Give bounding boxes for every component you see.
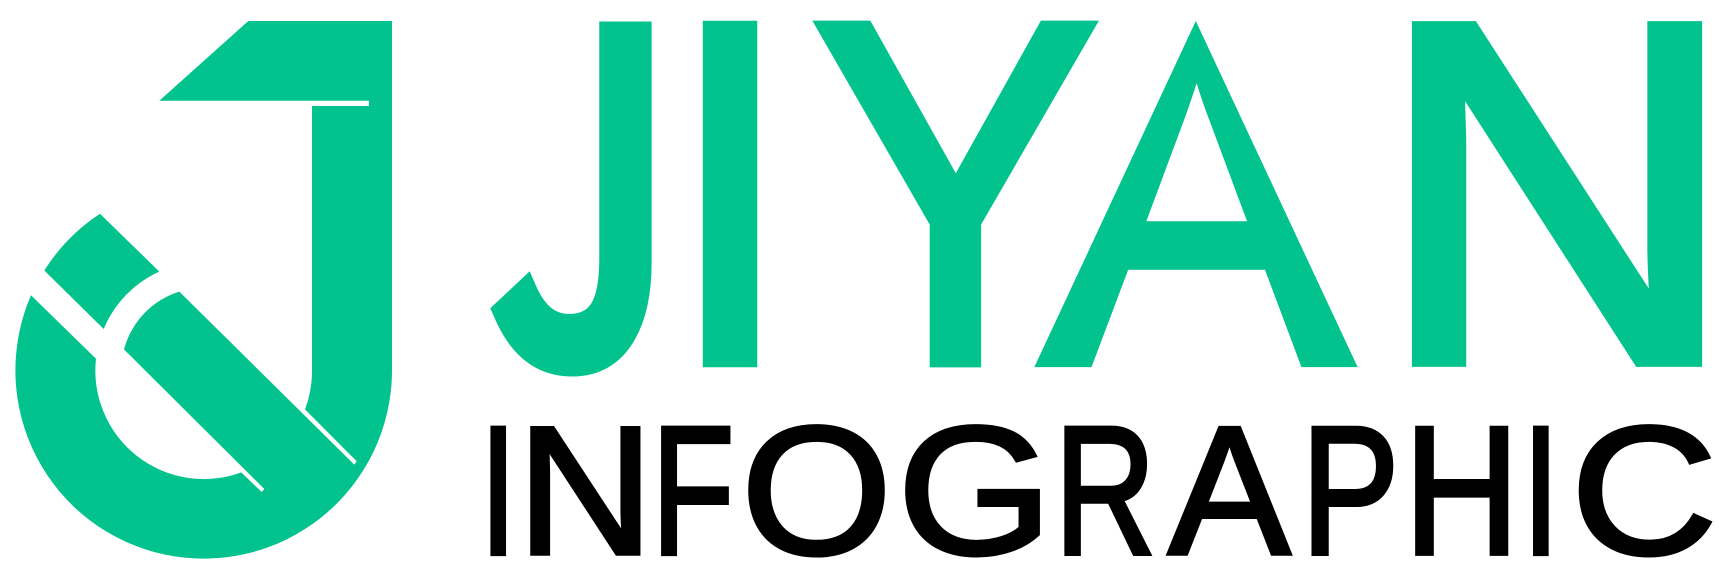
subtitle: INFOGRAPHIC (480, 388, 1717, 581)
title: JIYAN (492, 0, 1719, 485)
A apex trim right (1196, 12, 1366, 367)
A apex trim left (1026, 12, 1196, 367)
logo J body with ring and diagonal bar (15, 21, 392, 559)
logo upper-left ring segment (44, 214, 159, 329)
icon: J logo mark (15, 21, 392, 559)
